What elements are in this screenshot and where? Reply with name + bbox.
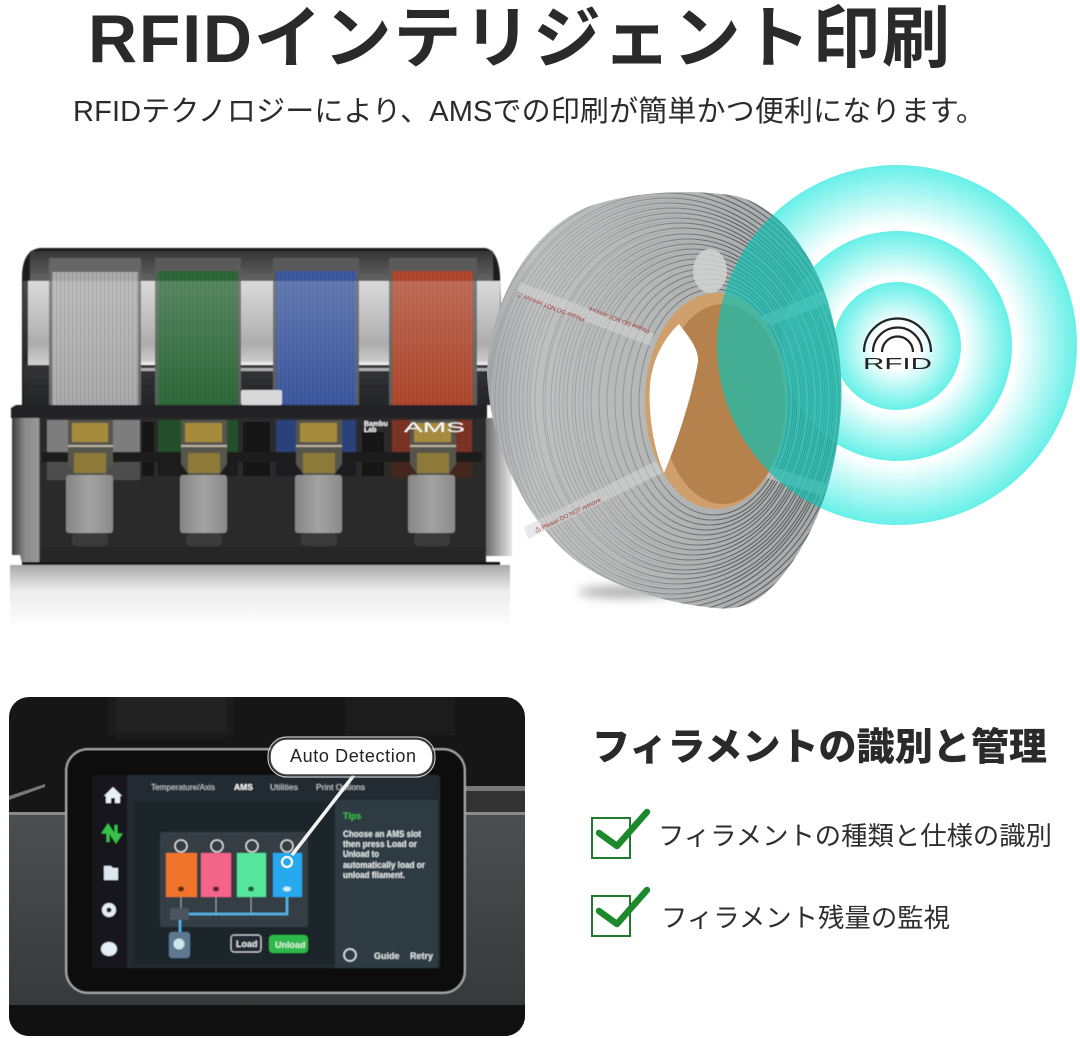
core opening <box>650 324 698 473</box>
printer screen photo panel <box>9 697 525 1036</box>
unload button <box>269 935 308 953</box>
tab labels: Temperature/Axis <box>151 782 215 792</box>
checkbox icon <box>592 890 647 936</box>
roll body and windings <box>487 192 842 608</box>
window lower rail <box>24 365 502 405</box>
bottom actions: Retry <box>410 951 433 961</box>
checklist item 1: フィラメントの種類と仕様の識別 <box>658 821 1052 851</box>
tips text: Choose an AMS slot <box>343 829 421 839</box>
filament path <box>170 897 287 933</box>
tape warning text: ⚠ Please DO NOT remove <box>699 447 771 477</box>
brand label: Lab <box>364 427 376 434</box>
RFID tag on the roll <box>693 249 727 293</box>
tab labels: Utilities <box>270 782 298 792</box>
tape warning text: ⚠ Please DO NOT remove <box>534 496 603 535</box>
bottom actions <box>344 949 433 961</box>
filament spool: blue <box>273 258 359 406</box>
window background <box>28 281 500 365</box>
filament spool: red <box>389 258 477 406</box>
photo backdrop <box>9 697 525 1036</box>
checklist item 2 <box>592 890 950 936</box>
tab labels: AMS <box>234 782 253 792</box>
bottom actions: Guide <box>374 951 400 961</box>
motors <box>66 475 455 546</box>
tab labels: Print Options <box>316 782 365 792</box>
floor reflection <box>10 565 510 627</box>
checkbox icon <box>592 812 647 858</box>
tips text: Tips <box>343 811 361 821</box>
gear mechanisms <box>68 420 456 475</box>
cardboard core <box>645 293 787 509</box>
tape strips <box>516 282 828 539</box>
load button: Load <box>236 939 258 949</box>
checklist item 2: フィラメント残量の監視 <box>661 903 950 933</box>
extruder <box>169 932 190 958</box>
title: RFIDインテリジェント印刷 <box>88 1 950 77</box>
brand label: AMS <box>404 419 465 435</box>
right body edge <box>485 418 512 556</box>
tape warning text: ⚠ Please DO NOT remove <box>702 321 773 354</box>
front top bar <box>11 405 487 418</box>
brand label <box>364 419 465 435</box>
left body pillar <box>12 418 40 563</box>
AMS slots <box>166 840 302 897</box>
AMS slot box <box>160 832 308 927</box>
RFID icon <box>863 318 932 373</box>
subtitle: RFIDテクノロジーにより、AMSでの印刷が簡単かつ便利になります。 <box>73 95 985 128</box>
tape warning text: Please DO NOT remove ⚠ <box>515 290 586 323</box>
upper housing <box>22 248 504 405</box>
tips panel <box>335 800 438 968</box>
section heading: フィラメントの識別と管理 <box>592 727 1047 769</box>
tablet bezel <box>66 749 465 993</box>
tips text <box>343 811 425 880</box>
tape warning text: Please DO NOT remove <box>587 305 651 334</box>
screen <box>92 775 440 968</box>
top dark band <box>30 251 493 282</box>
load button <box>231 935 261 952</box>
teal overlap of signal on roll <box>717 214 842 508</box>
checklist item 1 <box>592 812 1052 858</box>
callout pointer <box>282 775 354 867</box>
RFID reader widget <box>241 390 282 405</box>
tips text: automatically load or <box>343 860 425 870</box>
RFID signal rings <box>717 165 1077 525</box>
filament refill roll <box>487 192 842 608</box>
filament spool: green <box>155 258 241 406</box>
spool reflections in body <box>42 420 482 480</box>
base line <box>40 547 486 563</box>
AMS unit illustration <box>10 248 512 627</box>
sidebar icons <box>101 787 122 956</box>
fine windings on the left side <box>490 196 670 596</box>
callout: auto detection: Auto Detection <box>290 746 416 766</box>
tips text: Unload to <box>343 849 379 859</box>
tape warning text <box>515 290 773 535</box>
callout: auto detection <box>268 737 435 777</box>
roll ground shadow <box>578 586 678 598</box>
sidebar <box>92 775 127 968</box>
unload button: Unload <box>275 940 306 950</box>
tab labels <box>151 782 365 792</box>
filament spool: gray <box>49 258 141 406</box>
tips text: then press Load or <box>343 839 417 849</box>
AMS main panel <box>170 931 262 959</box>
translucent lid highlight <box>23 281 502 405</box>
brand label: Bambu <box>364 421 388 428</box>
RFID icon: RFID <box>863 356 932 373</box>
lower body <box>40 418 486 563</box>
tips text: unload filament. <box>343 870 405 880</box>
